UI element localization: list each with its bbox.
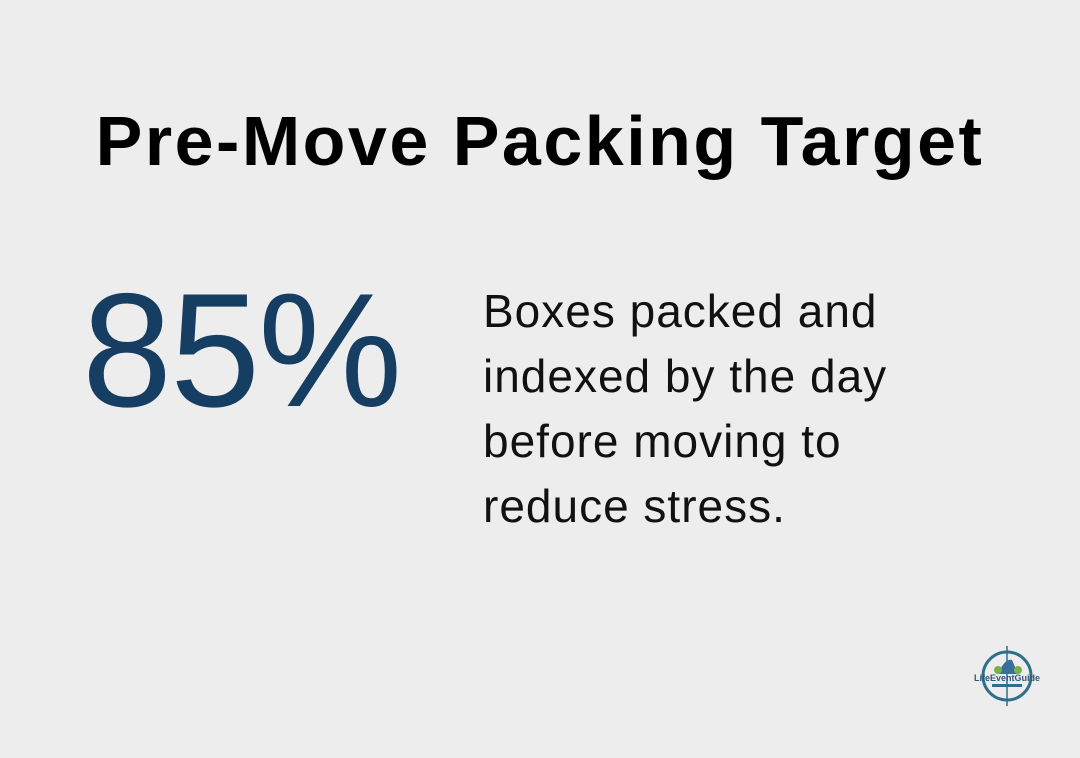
logo xyxy=(974,646,1040,706)
description text xyxy=(483,285,887,532)
logo: LifeEventGuide xyxy=(974,673,1040,683)
stat number: 85% xyxy=(82,260,400,441)
description text: before moving to xyxy=(483,415,842,467)
description text: Boxes packed and xyxy=(483,285,878,337)
description text: reduce stress. xyxy=(483,480,786,532)
description text: indexed by the day xyxy=(483,350,887,402)
title: Pre-Move Packing Target xyxy=(96,102,984,180)
